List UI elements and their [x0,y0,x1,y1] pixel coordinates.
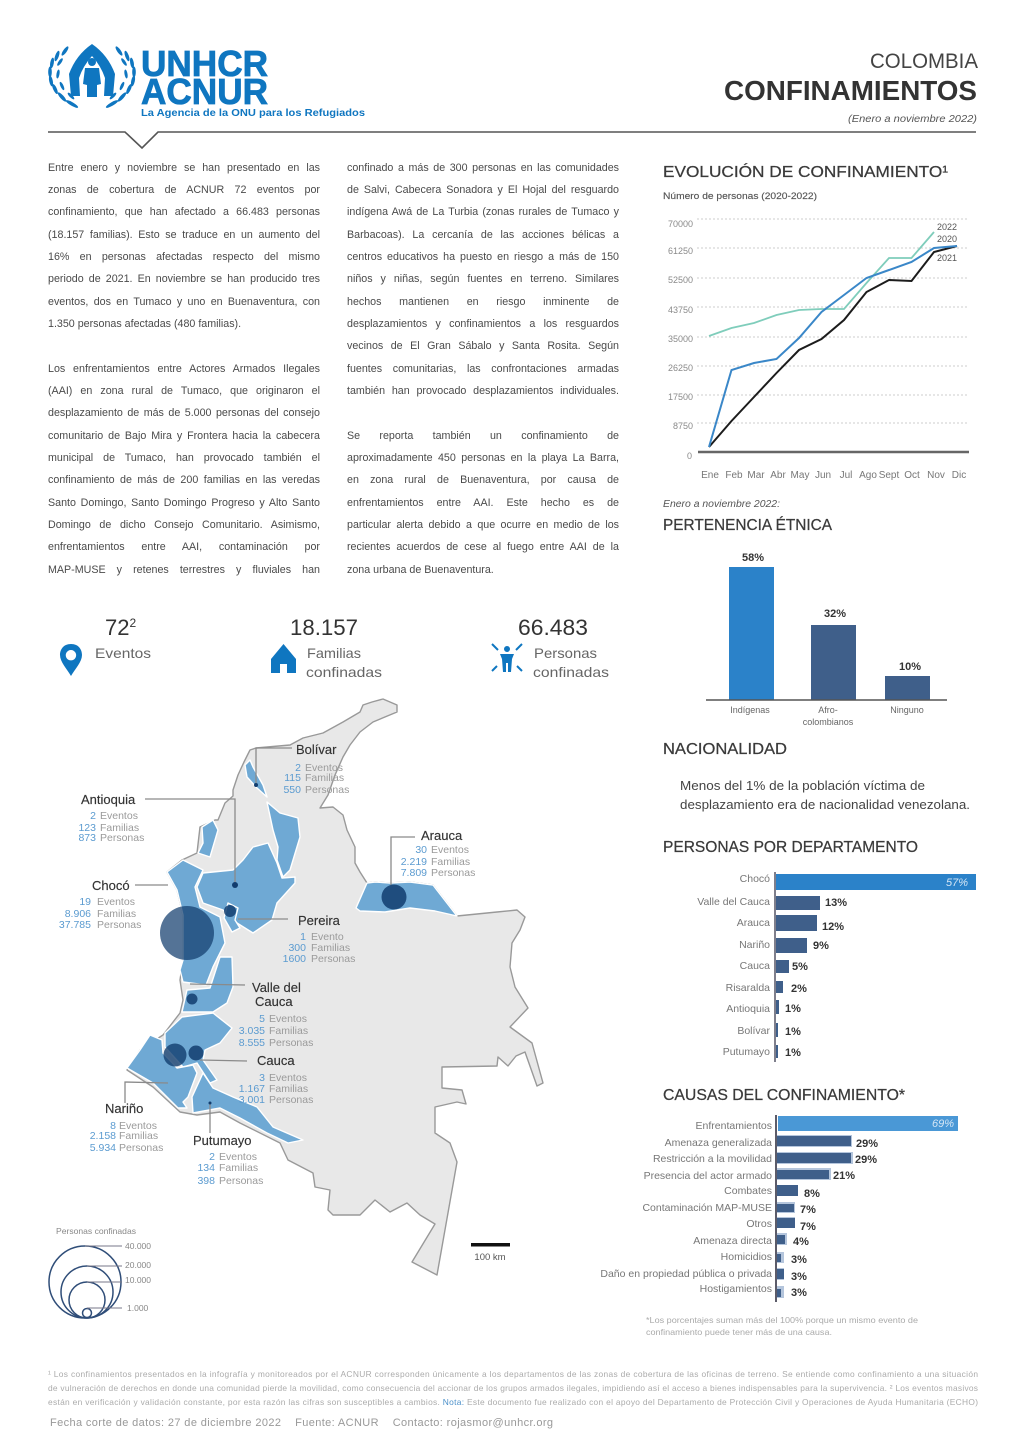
label: Antioquia [78,792,144,844]
text: middle column: desplazamientos y confinamientos a los resguardos [347,318,619,330]
label: Arauca: 30 [415,844,427,856]
category labels: Amenaza directa [693,1235,772,1247]
label: Bolivar: Familias [305,772,344,784]
heading: causas: CAUSAS DEL CONFINAMIENTO* [663,1087,905,1104]
label: Valle del Cauca: 5 [259,1013,265,1025]
category labels: Restricción a la movilidad [653,1153,772,1165]
label: Valle del Cauca: Valle del [252,980,301,995]
title: (Enero a noviembre 2022) [848,113,977,125]
category labels: colombianos [803,717,854,727]
label: Putumayo: Personas [219,1175,263,1187]
text: middle column: centros educativos ha puesto en riesgo a más de 150 [347,251,619,263]
text: left column: eventos, dos en Tumaco y uno en Buenaventura, con [48,296,320,308]
kpi: eventos: 72 [105,615,129,640]
panel: causas del confinamiento [600,1087,958,1337]
label: Choco: Chocó [92,878,130,893]
values: 69% [932,1118,954,1130]
x axis labels: May [791,470,809,481]
text: middle column: particular alerta debido a que ocurre en medio de los [347,519,619,531]
panel: pertenencia etnica [663,499,947,727]
panel: nacionalidad [663,741,970,812]
label: Choco: Familias [97,908,136,920]
period note: Enero a noviembre 2022: [663,499,780,510]
text: left column: municipal de Tumaco, han provocado también el [48,452,320,464]
label: Narino [90,1101,163,1154]
category labels [697,873,770,1058]
text: middle column [347,162,619,576]
text: left column: Entre enero y noviembre se han presentado en las [48,162,320,174]
label: Pereira: Evento [311,931,344,943]
scale bar [471,1243,510,1263]
text: left column: 16% en personas afectadas respecto del mismo [48,251,320,263]
text: left column: Santo Domingo, Santo Domingo Progreso y Alto Santo [48,497,320,509]
label: Putumayo: 2 [209,1151,215,1163]
label: Arauca: Personas [431,867,475,879]
text: left column: comunitario de Bajo Mira y Frontera hacia la cabecera [48,430,320,442]
footer notes: ¹ Los confinamientos presentados en la infografía y monitoreados por el ACNUR corresponden únicamente a los departamentos de las zonas de cobertura de las oficinas de terreno. Se entiende como confinamiento a una situación [48,1369,978,1379]
text: left column: 1.350 personas afectadas (480 familias). [48,318,241,330]
y axis labels: 52500 [668,275,693,285]
kpi: eventos: Eventos [95,645,151,661]
label: Putumayo: 134 [197,1162,215,1174]
kpi: personas: Personas [534,645,597,661]
category labels [600,1120,772,1295]
x axis labels [701,470,966,481]
kpi: personas [492,615,609,680]
category labels: Combates [724,1185,772,1197]
label: Bolivar: 2 [295,762,301,774]
map: bubbles [160,783,406,1104]
label: Bolivar: 115 [284,772,301,784]
values: 29% [855,1154,877,1166]
nacionalidad text [680,779,970,812]
text: left column [48,162,320,576]
bars [776,874,976,1058]
kpi: familias: confinadas [306,664,382,680]
series labels: 2022 [937,222,957,232]
department: Choco [167,860,225,985]
footnote causas [646,1315,918,1337]
label: Valle del Cauca: Cauca [255,994,293,1009]
label: Arauca [401,828,475,879]
category labels: Nariño [739,939,770,951]
category labels: Arauca [737,917,770,929]
label: Choco [59,878,141,931]
values: 7% [800,1221,816,1233]
label: Putumayo: Familias [219,1162,258,1174]
values: 12% [822,921,844,933]
title [724,50,978,125]
values [742,552,921,673]
logo wordmark [141,43,365,119]
category labels: Valle del Cauca [697,896,770,908]
text: middle column: Se reporta también un confinamiento de [347,430,619,442]
series labels: 2021 [937,253,957,263]
title: COLOMBIA [870,50,978,73]
footer notes: están en verificación y validación constante, por esta razón las cifras son susceptibles a cambios. Nota: Este documento fue realizado con el apoyo del Departamento de Protección Civil y Operaciones de Ayuda Humanitaria (ECHO) [48,1397,978,1407]
values: 21% [833,1170,855,1182]
label: Bolivar: 550 [283,784,301,796]
label: Valle del Cauca: 8.555 [239,1037,265,1049]
text: left column: Los enfrentamientos entre Actores Armados Ilegales [48,363,320,375]
footnote causas: confinamiento puede tener más de una causa. [646,1327,832,1337]
nacionalidad text: Menos del 1% de la población víctima de [680,779,925,793]
label: Putumayo: 398 [197,1175,215,1187]
category labels: Amenaza generalizada [665,1137,772,1149]
label: Narino: 2.158 [90,1130,116,1142]
legend: bubble sizes: 10.000 [125,1275,151,1285]
category labels: Chocó [740,873,770,885]
label: Choco: 37.785 [59,919,91,931]
y axis labels: 8750 [673,421,693,431]
footer source line: Fecha corte de datos: 27 de diciembre 2022 Fuente: ACNUR Contacto: rojasmor@unhcr.org [50,1417,553,1429]
text: left column: MAP-MUSE y retenes terrestres y fluviales han [48,564,320,576]
heading: nacionalidad: NACIONALIDAD [663,741,787,758]
text: left column: confinamiento, que han afectado a 66.483 personas [48,206,320,218]
label: Cauca: Eventos [269,1072,307,1084]
label: Antioquia: Antioquia [81,792,136,807]
text: left column: desplazamiento de más de 5.000 personas del consejo [48,407,320,419]
y axis labels: 26250 [668,363,693,373]
footnote causas: *Los porcentajes suman más del 100% porque un mismo evento de [646,1315,918,1325]
series labels: 2020 [937,234,957,244]
KPI row [60,615,609,680]
x axis labels: Jul [840,470,852,481]
values: 9% [813,940,829,952]
category labels: Homicidios [721,1251,772,1263]
footer notes: de vulneración de derechos en donde una comunidad pierde la movilidad, como consecuencia del accionar de los grupos armados ilegales, impidiendo así el acceso a bienes indispensables para la supervivencia. ² Los eventos masivos [48,1383,978,1393]
category labels: Hostigamientos [700,1283,772,1295]
text: middle column: también han provocado desplazamientos individuales. [347,385,619,397]
panel: line chart evolucion [663,162,969,481]
y axis labels: 70000 [668,219,693,229]
kpi: eventos: 2 [129,616,136,630]
department: Arauca [356,882,457,916]
heading: pertenencia: PERTENENCIA ÉTNICA [663,515,832,534]
label: Arauca: Arauca [421,828,463,843]
text: middle column: zona urbana de Buenaventura. [347,564,494,576]
line: 2021 [709,246,957,447]
category labels: Enfrentamientos [696,1120,772,1132]
label: Narino: 5.934 [90,1142,116,1154]
label: Cauca: Cauca [257,1053,295,1068]
department: Putumayo [192,1073,303,1143]
text: middle column: en zona rural de Buenaventura, por causa de [347,474,619,486]
values: 3% [791,1271,807,1283]
label: Cauca [239,1053,313,1106]
label: Narino: Nariño [105,1101,143,1116]
label: Narino: 8 [110,1120,116,1132]
y axis labels: 17500 [668,392,693,402]
values: 5% [792,961,808,973]
line: 2020 [709,246,957,447]
kpi: personas: 66.483 [518,615,588,640]
label: Narino: Personas [119,1142,163,1154]
department: Risaralda [224,903,240,932]
label: Choco: Personas [97,919,141,931]
x axis labels: Abr [770,470,786,481]
department: Valle del Cauca [182,957,233,1012]
values: 29% [856,1138,878,1150]
map: leader lines [125,748,415,1133]
text: middle column: recientes acuerdos de cese al fuego entre AAI de la [347,541,619,553]
kpi: personas: confinadas [533,664,609,680]
category labels: Ninguno [890,705,924,715]
label: Cauca: Personas [269,1094,313,1106]
text: left column: (18.157 familias). Esto se traduce en un aumento del [48,229,320,241]
label: Antioquia: Eventos [100,810,138,822]
values: 8% [804,1188,820,1200]
kpi: eventos [60,615,151,676]
text: middle column: Barbacoas). La cercanía de las acciones bélicas a [347,229,619,241]
map: affected departments [127,760,457,1143]
label: Valle del Cauca [239,980,313,1049]
values [791,1118,954,1299]
icon: location pin [60,644,82,676]
category labels: Presencia del actor armado [644,1170,772,1182]
text: middle column: fuentes comunitarias, las confrontaciones armadas [347,363,619,375]
label: Pereira: Familias [311,942,350,954]
label: Pereira: 300 [288,942,306,954]
label: Arauca: Eventos [431,844,469,856]
category labels: Daño en propiedad pública o privada [600,1268,772,1280]
values: 3% [791,1287,807,1299]
label: Antioquia: 123 [78,822,96,834]
x axis labels: Oct [904,470,920,481]
values: 2% [791,983,807,995]
x axis labels: Feb [725,470,743,481]
series labels [937,222,957,263]
label: Antioquia: 2 [90,810,96,822]
category labels: Putumayo [723,1046,770,1058]
heading: personas por departamento: PERSONAS POR DEPARTAMENTO [663,839,918,856]
logo wordmark: ACNUR [141,71,268,112]
title: CONFINAMIENTOS [724,75,977,106]
label: Cauca: 3.001 [239,1094,265,1106]
map of Colombia [59,699,543,1275]
icon: UNHCR emblem [48,44,136,109]
values: 1% [785,1026,801,1038]
label: Choco: 19 [79,896,91,908]
label: Pereira [283,913,355,965]
x axis labels: Ene [701,470,719,481]
icon: house [271,644,296,673]
label: Arauca: 2.219 [401,856,427,868]
legend: bubble sizes: Personas confinadas [56,1226,136,1236]
label: Antioquia: 873 [78,832,96,844]
map: country outline [127,699,543,1275]
text: left column: periodo de 2021. En noviembre se han producido tres [48,273,320,285]
label: Antioquia: Familias [100,822,139,834]
values: 1% [785,1047,801,1059]
x axis labels: Ago [859,470,877,481]
kpi: familias: 18.157 [290,615,358,640]
y axis labels: 43750 [668,305,693,315]
text: left column: Domingo de dicho Consejo Comunitario. Asimismo, [48,519,320,531]
y axis labels: 61250 [668,246,693,256]
header: logo [48,43,365,119]
text: left column: zonas de cobertura de ACNUR 72 eventos por [48,184,320,196]
text: middle column: aproximadamente 450 personas en la playa La Barra, [347,452,619,464]
scale bar: 100 km [474,1252,506,1263]
values: 10% [899,661,921,673]
text: left column: enfrentamientos entre AAI, contaminación por [48,541,320,553]
values [785,877,968,1059]
category labels: Otros [746,1218,772,1230]
panel: personas por departamento [663,839,976,1062]
label: Putumayo: Eventos [219,1151,257,1163]
x axis labels: Mar [747,470,765,481]
values: 58% [742,552,764,564]
label: Valle del Cauca: Familias [269,1025,308,1037]
nacionalidad text: desplazamiento era de nacionalidad venezolana. [680,798,970,812]
kpi: familias: Familias [307,645,361,661]
label: Arauca: Familias [431,856,470,868]
values: 1% [785,1003,801,1015]
text: middle column: de Salvi, Cabecera Sonadora y El Hojal del resguardo [347,184,619,196]
department: Narino [127,1035,197,1108]
label: Bolivar: Eventos [305,762,343,774]
x axis labels: Nov [927,470,945,481]
label: Putumayo [193,1133,263,1187]
label: Valle del Cauca: 3.035 [239,1025,265,1037]
bars [729,567,930,700]
category labels: Risaralda [726,982,770,994]
y axis labels: 35000 [668,334,693,344]
label: Cauca: Familias [269,1083,308,1095]
text: middle column: hechos mantienen en riesgo inminente de [347,296,619,308]
label: Bolivar [283,742,349,796]
department: Cauca [165,1013,232,1083]
header rule with notch [48,132,976,148]
values: 57% [946,877,968,889]
label: Choco: Eventos [97,896,135,908]
logo wordmark: La Agencia de la ONU para los Refugiados [141,107,365,119]
values: 3% [791,1254,807,1266]
label: Narino: Eventos [119,1120,157,1132]
label: Cauca: 1.167 [239,1083,265,1095]
logo wordmark: UNHCR [141,43,268,84]
label: Antioquia: Personas [100,832,144,844]
legend: bubble sizes [49,1226,151,1318]
department: Antioquia [197,820,295,933]
text: middle column: niños y niñas, según fuentes en terreno. Similares [347,273,619,285]
heading: evolucion: EVOLUCIÓN DE CONFINAMIENTO¹ [663,162,948,181]
values: 13% [825,897,847,909]
subheading: numero de personas: Número de personas (2020-2022) [663,191,817,202]
label: Valle del Cauca: Personas [269,1037,313,1049]
y axis labels [668,219,693,461]
label: Pereira: 1600 [283,953,306,965]
values: 7% [800,1204,816,1216]
label: Pereira: Pereira [298,913,341,928]
values: 4% [793,1236,809,1248]
label: Arauca: 7.809 [401,867,427,879]
footer notes [48,1369,978,1407]
label: Bolivar: Bolívar [296,742,337,757]
label: Bolivar: Personas [305,784,349,796]
bar outlines [777,1135,853,1298]
label: Pereira: 1 [300,931,306,943]
line: 2022 [709,232,934,336]
legend: bubble sizes: 20.000 [125,1260,151,1270]
category labels: Bolívar [737,1025,770,1037]
category labels: Contaminación MAP-MUSE [642,1202,772,1214]
label: Cauca: 3 [259,1072,265,1084]
y axis labels: 0 [687,451,692,461]
x axis labels: Sept [879,470,900,481]
text: left column: confinamiento de más de 200 familias en las veredas [48,474,320,486]
label: Narino: Familias [119,1130,158,1142]
department: Bolivar [245,760,300,877]
text: middle column: enfrentamientos entre AAI. Este hecho es de [347,497,619,509]
text: middle column: indígena Awá de La Turbia (zonas rurales de Tumaco y [347,206,619,218]
kpi: familias [271,615,382,680]
category labels: Indígenas [730,705,770,715]
bars [777,1116,958,1297]
label: Putumayo: Putumayo [193,1133,252,1148]
legend: bubble sizes: 40.000 [125,1241,151,1251]
category labels: Antioquia [726,1003,770,1015]
text: middle column: confinado a más de 300 personas en las comunidades [347,162,619,174]
legend: bubble sizes: 1.000 [127,1303,149,1313]
text: left column: (AAI) en zona rural de Tumaco, que originaron el [48,385,320,397]
category labels [730,705,924,727]
label: Pereira: Personas [311,953,355,965]
category labels: Afro- [818,705,838,715]
label: Valle del Cauca: Eventos [269,1013,307,1025]
x axis labels: Jun [815,470,831,481]
values: 32% [824,608,846,620]
x axis labels: Dic [952,470,966,481]
label: Choco: 8.906 [65,908,91,920]
category labels: Cauca [740,960,770,972]
icon: person with arrows [492,644,522,672]
text: middle column: vecinos de El Gran Sábalo y Santa Rosita. Según [347,340,619,352]
